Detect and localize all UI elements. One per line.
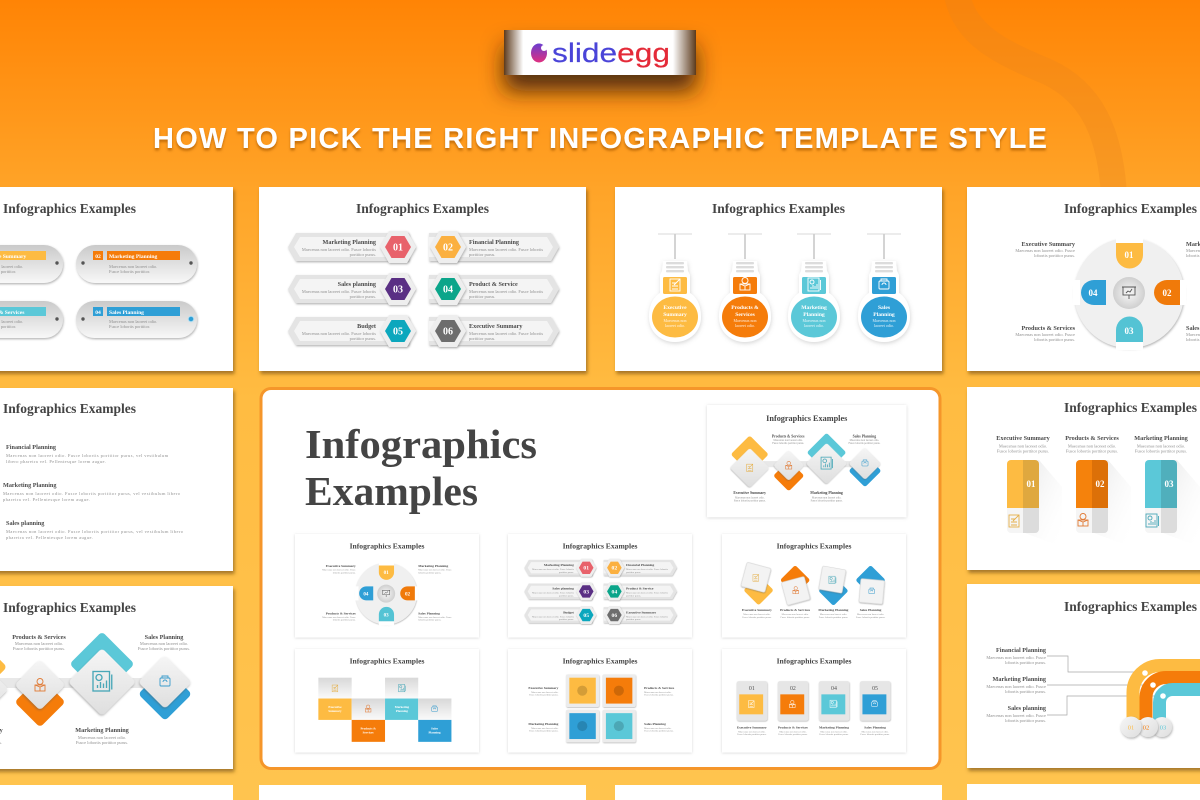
thumbnail: colored squares: Maecenas non laoreet odio. xyxy=(531,691,559,694)
panel: pill labels slide (cropped left) xyxy=(0,187,233,371)
thumbnail: hexagons: Sales planning xyxy=(552,587,574,591)
hexagon text: 03 xyxy=(393,284,403,296)
bulb 3: Marketing xyxy=(801,305,827,311)
arcs text xyxy=(986,647,1047,723)
thumbnail: stepped tiles: Infographics Examples xyxy=(350,657,424,666)
wheel text: Products & Services xyxy=(1022,325,1076,332)
wheel text: lobortis porttitor purus. xyxy=(1034,253,1075,258)
thumbnail: hexagons: Marketing Planning xyxy=(544,563,574,567)
hexagon text: 02 xyxy=(443,242,453,254)
thumbnail: stepped tiles: Products & xyxy=(360,726,376,730)
bulb 4: laoreet odio. xyxy=(874,323,894,328)
wheel text: 02 xyxy=(1162,288,1172,298)
logo wordmark: slide egg xyxy=(552,38,670,68)
sales planning entry xyxy=(6,520,184,540)
thumbnail: colored squares: Infographics Examples xyxy=(563,657,637,666)
wheel text: Maecenas non laoreet odio. Fusce xyxy=(1015,248,1075,253)
thumbnail: tilted tiles: Products & Services xyxy=(780,608,811,612)
thumbnail: numbered cards: 01 xyxy=(749,686,755,692)
bulb 2 xyxy=(719,234,771,342)
thumbnail: colored squares: Maecenas non laoreet odio. xyxy=(644,727,672,730)
hexagon text: Budget xyxy=(357,323,377,330)
bulb 1 xyxy=(649,234,701,342)
panel: diamonds slide (cropped left) xyxy=(0,586,233,769)
panel: plain text list slide (cropped left): Infographics Examples xyxy=(3,401,136,416)
thumbnail: diamonds: Maecenas non laoreet odio. xyxy=(812,496,842,499)
bulb 3: Maecenas non xyxy=(802,318,826,323)
diamonds text: Sales Planning xyxy=(145,634,184,641)
bulb 4: Maecenas non xyxy=(872,318,896,323)
panel: wheel slide (cropped right) xyxy=(967,187,1200,371)
thumbnail: colored squares xyxy=(508,649,692,753)
thumbnail: numbered cards: Maecenas non laoreet odio. xyxy=(779,730,807,733)
thumbnail: diamonds: Products & Services xyxy=(772,434,805,438)
bulb 1: Executive xyxy=(663,305,687,311)
column 3: 03 xyxy=(1164,479,1174,489)
thumbnail: tilted tiles: Fusce lobortis porttitor purus. xyxy=(780,616,810,619)
thumbnail: numbered cards: Executive Summary xyxy=(737,725,767,729)
hexagon text: Maecenas non laoreet odio. Fusce lobortis xyxy=(469,331,543,336)
marketing planning entry xyxy=(3,482,181,502)
thumbnail: colored squares: Fusce lobortis porttitor purus. xyxy=(644,730,674,733)
logo xyxy=(504,30,696,75)
main heading: Examples xyxy=(305,468,478,514)
thumbnail: colored squares: Maecenas non laoreet odio. xyxy=(531,727,559,730)
diamonds text: Maecenas non laoreet odio. xyxy=(15,641,63,646)
thumbnail: hexagons: Maecenas non laoreet odio. Fusce lobortis xyxy=(626,615,668,618)
diamonds text xyxy=(0,634,190,745)
thumbnail: diamonds: Fusce lobortis porttitor purus. xyxy=(848,442,881,445)
thumbnail: diamonds: Maecenas non laoreet odio. xyxy=(773,439,803,442)
thumbnail: diamonds: Maecenas non laoreet odio. xyxy=(850,439,879,442)
column 1: Maecenas non laoreet odio. xyxy=(999,444,1047,448)
thumbnail: hexagons: Budget xyxy=(563,610,575,614)
column 2 xyxy=(1065,435,1131,547)
icon: egg xyxy=(531,44,547,62)
thumbnail: wheel: Maecenas non laoreet odio. Fusce xyxy=(322,569,357,572)
thumbnail: hexagons: porttitor purus. xyxy=(626,594,641,597)
hexagon text: Maecenas non laoreet odio. Fusce lobortis xyxy=(302,289,376,294)
sales planning entry: Maecenas non laoreet odio. Fusce lobortis porttitor purus, vel vestibulum libero xyxy=(6,529,184,535)
column 2: Maecenas non laoreet odio. xyxy=(1068,444,1116,448)
diamonds text: Fusce lobortis porttitor purus. xyxy=(138,646,190,651)
thumbnail: stepped tiles xyxy=(295,649,479,753)
panel: pill labels slide (cropped left): Infographics Examples xyxy=(3,201,136,216)
thumbnail: colored squares: Maecenas non laoreet odio. xyxy=(644,691,672,694)
thumbnail: tilted tiles xyxy=(722,534,906,638)
thumbnail: hexagons: Maecenas non laoreet odio. Fusce lobortis xyxy=(626,568,668,571)
thumbnail: colored squares: Products & Services xyxy=(644,686,675,690)
thumbnail: numbered cards: Maecenas non laoreet odio. xyxy=(820,730,848,733)
thumbnail: hexagons: 03 xyxy=(583,589,589,595)
thumbnail: tilted tiles: Marketing Planning xyxy=(818,608,849,612)
panel: arcs slide (cropped right) xyxy=(967,584,1200,768)
hexagon text: 06 xyxy=(443,326,453,338)
bulb 3 xyxy=(788,234,840,342)
arc dots and number discs xyxy=(1120,670,1172,738)
bulb 2: Maecenas non xyxy=(734,318,756,323)
arcs text: Maecenas non laoreet odio. Fusce xyxy=(986,713,1046,718)
bulb 4 xyxy=(858,234,910,342)
thumbnail: tilted tiles: Infographics Examples xyxy=(777,542,851,551)
thumbnail: hexagons: 02 xyxy=(612,566,617,572)
thumbnail: hexagons: Product & Service xyxy=(626,587,654,591)
arcs text: Financial Planning xyxy=(996,647,1047,654)
arc dots and number discs: 01 xyxy=(1128,724,1134,732)
thumbnail: wheel: 01 xyxy=(384,570,389,576)
wheel text: Maecenas non laoreet odio. Fusce xyxy=(1015,332,1075,337)
thumbnail: wheel: Marketing Planning xyxy=(418,564,448,568)
pill text: Maecenas non laoreet odio. xyxy=(109,319,157,324)
wheel text xyxy=(1015,241,1200,342)
thumbnail: wheel: lobortis porttitor purus. xyxy=(333,571,356,574)
panel: wheel slide (cropped right): Infographics Examples xyxy=(1064,201,1197,216)
pill text xyxy=(0,254,158,329)
thumbnail: hexagons: porttitor purus. xyxy=(626,571,641,574)
pill text: Fusce lobortis porttitor. xyxy=(109,324,150,329)
wheel text: 01 xyxy=(1124,250,1134,260)
thumbnail: numbered cards: Products & Services xyxy=(778,725,809,729)
thumbnail: hexagons: Financial Planning xyxy=(626,563,654,567)
hexagon text: Financial Planning xyxy=(469,239,520,246)
thumbnail: numbered cards: Fusce lobortis porttitor purus. xyxy=(737,733,767,736)
thumbnail: tilted tiles: Fusce lobortis porttitor purus. xyxy=(742,616,772,619)
financial planning entry: Maecenas non laoreet odio. Fusce lobortis porttitor purus, vel vestibulum xyxy=(6,453,169,459)
hexagon text: Maecenas non laoreet odio. Fusce lobortis xyxy=(469,247,543,252)
diamonds graphic xyxy=(0,631,192,727)
thumbnail: diamonds: Executive Summary xyxy=(733,491,766,495)
wheel graphic xyxy=(1073,236,1186,350)
thumbnail: hexagons: Maecenas non laoreet odio. Fusce lobortis xyxy=(532,615,574,618)
arcs text: Marketing Planning xyxy=(993,676,1047,683)
hexagon text: porttitor purus. xyxy=(469,294,495,299)
column 3 xyxy=(1134,435,1200,547)
thumbnail: tilted tiles: Maecenas non laoreet odio. xyxy=(782,613,809,616)
thumbnail: colored squares: Fusce lobortis porttitor purus. xyxy=(644,694,674,697)
panel: arcs slide (cropped right): Infographics Examples xyxy=(1064,599,1197,614)
thumbnail: tilted tiles: Sales Planning xyxy=(860,608,882,612)
column 1: 01 xyxy=(1026,479,1036,489)
thumbnail: wheel: 02 xyxy=(405,591,411,597)
thumbnail: hexagons: 01 xyxy=(583,566,589,572)
bulb 1: Maecenas non xyxy=(664,318,686,323)
sales planning entry: Sales planning xyxy=(6,520,45,527)
panel: hexagon list slide xyxy=(259,187,586,371)
wheel text: lobortis porttitor purus. xyxy=(1034,337,1075,342)
wheel text: Executive Summary xyxy=(1022,241,1076,248)
hexagon text: porttitor purus. xyxy=(350,294,376,299)
pill text: Sales Planning xyxy=(109,310,144,316)
marketing planning entry: pharetra vel. Pellentesque lorem augue. xyxy=(3,497,90,502)
thumbnail: hexagons: Maecenas non laoreet odio. Fusce lobortis xyxy=(532,568,574,571)
marketing planning entry: Maecenas non laoreet odio. Fusce lobortis porttitor purus, vel vestibulum libero xyxy=(3,491,181,497)
thumbnail: numbered cards: 05 xyxy=(872,686,878,692)
thumbnail: stepped tiles: Marketing xyxy=(395,705,409,709)
thumbnail: hexagons: porttitor purus. xyxy=(626,618,641,621)
bulb 3: Planning xyxy=(803,312,825,318)
panel: columns slide (cropped right) xyxy=(967,387,1200,570)
financial planning entry: libero pharetra vel. Pellentesque lorem augue. xyxy=(6,459,106,464)
main heading xyxy=(305,421,537,514)
hexagon text: Product & Service xyxy=(469,281,518,288)
thumbnail: numbered cards: Sales Planning xyxy=(864,725,886,729)
thumbnail: diamonds: Maecenas non laoreet odio. xyxy=(735,496,765,499)
thumbnail: colored squares: Executive Summary xyxy=(528,686,559,690)
wheel text: 04 xyxy=(1088,288,1098,298)
thumbnail: diamonds: Sales Planning xyxy=(853,434,876,438)
diamonds text: Fusce lobortis porttitor purus. xyxy=(13,646,65,651)
bulb 2: laoreet odio. xyxy=(735,323,755,328)
thumbnail: numbered cards: Maecenas non laoreet odio. xyxy=(861,730,889,733)
thumbnail: tilted tiles: Maecenas non laoreet odio. xyxy=(743,613,771,616)
panel: hexagon list slide: Infographics Examples xyxy=(356,201,489,216)
column 2: Fusce lobortis porttitor purus. xyxy=(1066,448,1118,454)
hexagon text: 01 xyxy=(393,242,403,254)
column 3: Maecenas non laoreet odio. xyxy=(1137,444,1185,448)
pill text: 02 xyxy=(95,254,101,260)
arcs text: lobortis porttitor purus. xyxy=(1005,718,1046,723)
thumbnail: diamonds: Marketing Planning xyxy=(810,491,843,495)
thumbnail: colored squares: Fusce lobortis porttitor purus. xyxy=(529,694,559,697)
thumbnail: wheel: Maecenas non laoreet odio. Fusce xyxy=(418,569,453,572)
thumbnail: colored squares: Fusce lobortis porttitor purus. xyxy=(529,730,559,733)
thumbnail: hexagons: porttitor purus. xyxy=(559,571,574,574)
hexagon text: Maecenas non laoreet odio. Fusce lobortis xyxy=(302,247,376,252)
thumbnail: wheel: 04 xyxy=(363,591,369,597)
bulb 4: Planning xyxy=(873,312,895,318)
thumbnail: tilted tiles: Executive Summary xyxy=(742,608,772,612)
thumbnail: tilted tiles: Fusce lobortis porttitor purus. xyxy=(856,616,886,619)
thumbnail: tilted tiles: Maecenas non laoreet odio. xyxy=(820,613,847,616)
bulb 1: Summary xyxy=(663,312,687,318)
thumbnail: numbered cards: Marketing Planning xyxy=(819,725,849,729)
thumbnail: wheel: Executive Summary xyxy=(326,564,356,568)
thumbnail: hexagons: Maecenas non laoreet odio. Fusce lobortis xyxy=(626,592,668,595)
column 1: Fusce lobortis porttitor purus. xyxy=(997,448,1049,454)
thumbnail: stepped tiles: Services xyxy=(363,730,374,734)
thumbnail: diamonds: Fusce lobortis porttitor purus. xyxy=(772,442,804,445)
bulb 1: laoreet odio. xyxy=(665,323,685,328)
thumbnail: wheel xyxy=(295,534,479,638)
panel: central featured card xyxy=(261,388,940,768)
arcs graphic xyxy=(1133,666,1200,720)
marketing planning entry: Marketing Planning xyxy=(3,482,57,489)
diamonds text: Fusce lobortis porttitor purus. xyxy=(76,740,128,745)
hexagon graphic xyxy=(288,231,559,347)
arc dots and number discs: 02 xyxy=(1143,724,1149,732)
hexagon text: Sales planning xyxy=(338,281,377,288)
financial planning entry xyxy=(6,444,169,464)
thumbnail: hexagons: Maecenas non laoreet odio. Fusce lobortis xyxy=(532,592,574,595)
hexagon text: 04 xyxy=(443,284,453,296)
thumbnail: wheel: Products & Services xyxy=(326,611,356,615)
column 3: Fusce lobortis porttitor purus. xyxy=(1135,448,1187,454)
title: HOW TO PICK THE RIGHT INFOGRAPHIC TEMPLATE STYLE xyxy=(153,123,1047,155)
hexagon text: Maecenas non laoreet odio. Fusce lobortis xyxy=(302,331,376,336)
pill text: 04 xyxy=(95,310,101,316)
pill text: Maecenas non laoreet odio. xyxy=(109,264,157,269)
thumbnail: wheel: Maecenas non laoreet odio. Fusce xyxy=(418,616,453,619)
thumbnail: numbered cards: 02 xyxy=(790,686,796,692)
panel: columns slide (cropped right): Infographics Examples xyxy=(1064,400,1197,415)
arcs text: Maecenas non laoreet odio. Fusce xyxy=(986,684,1046,689)
column 2: Products & Services xyxy=(1065,435,1119,442)
bulb 2: Products & xyxy=(731,305,759,311)
hexagon text: porttitor purus. xyxy=(469,252,495,257)
thumbnail: stepped tiles: Planning xyxy=(429,730,441,734)
thumbnail: diamonds: Fusce lobortis porttitor purus. xyxy=(734,499,766,502)
financial planning entry: Financial Planning xyxy=(6,444,57,451)
panel: light bulbs slide xyxy=(615,187,942,371)
thumbnail: numbered cards: Maecenas non laoreet odio. xyxy=(738,730,766,733)
thumbnail: numbered cards: Fusce lobortis porttitor purus. xyxy=(860,733,890,736)
thumbnail: numbered cards: 04 xyxy=(831,686,837,692)
thumbnail: wheel: lobortis porttitor purus. xyxy=(418,619,442,622)
panel: light bulbs slide: Infographics Examples xyxy=(712,201,845,216)
thumbnail: stepped tiles: Executive xyxy=(328,705,342,709)
diamonds text: Maecenas non laoreet odio. xyxy=(78,735,126,740)
bulb 3: laoreet odio. xyxy=(804,323,824,328)
hexagon text: Marketing Planning xyxy=(323,239,377,246)
column 2: 02 xyxy=(1096,479,1105,489)
thumbnail: diamonds: Infographics Examples xyxy=(766,414,847,423)
thumbnail: hexagons: Executive Summary xyxy=(626,610,656,614)
thumbnail: tilted tiles: Maecenas non laoreet odio. xyxy=(857,613,885,616)
thumbnail: diamonds xyxy=(707,405,906,517)
arcs text: lobortis porttitor purus. xyxy=(1005,689,1046,694)
decorative wave xyxy=(957,0,1114,195)
thumbnail: hexagons: porttitor purus. xyxy=(559,618,574,621)
diamonds text: Maecenas non laoreet odio. xyxy=(140,641,188,646)
sales planning entry: pharetra vel. Pellentesque lorem augue. xyxy=(6,535,93,540)
wheel text: 03 xyxy=(1124,326,1134,336)
thumbnail: stepped tiles: Summary xyxy=(328,709,342,713)
panel: plain text list slide (cropped left) xyxy=(0,388,233,571)
thumbnail: numbered cards: Fusce lobortis porttitor purus. xyxy=(819,733,849,736)
thumbnail: hexagons: 06 xyxy=(612,613,617,619)
arcs text: lobortis porttitor purus. xyxy=(1005,660,1046,665)
thumbnail: diamonds: Fusce lobortis porttitor purus. xyxy=(811,499,843,502)
pill text: Marketing Planning xyxy=(109,254,158,260)
thumbnail: wheel: lobortis porttitor purus. xyxy=(333,619,356,622)
arcs text: Maecenas non laoreet odio. Fusce xyxy=(986,655,1046,660)
hexagon text xyxy=(302,239,543,341)
panel: diamonds slide (cropped left): Infographics Examples xyxy=(3,600,136,615)
hexagon text: Executive Summary xyxy=(469,323,523,330)
diamonds text: Marketing Planning xyxy=(75,727,130,734)
bulb 4: Sales xyxy=(878,305,891,311)
thumbnail: stepped tiles: Planning xyxy=(396,709,408,713)
hexagon text: porttitor purus. xyxy=(469,336,495,341)
diamonds text: Products & Services xyxy=(12,634,66,641)
hexagon text: 05 xyxy=(393,326,403,338)
thumbnail: wheel: Maecenas non laoreet odio. Fusce xyxy=(322,616,357,619)
thumbnail: hexagons: 05 xyxy=(583,613,589,619)
column 1: Executive Summary xyxy=(996,435,1051,442)
panel: bottom row slide stubs xyxy=(0,784,1200,800)
thumbnail: wheel: lobortis porttitor purus. xyxy=(418,571,442,574)
bulb 2: Services xyxy=(735,312,756,318)
pills graphic xyxy=(0,245,197,338)
hexagon text: porttitor purus. xyxy=(350,336,376,341)
thumbnail: hexagons: 04 xyxy=(612,589,617,595)
thumbnail: numbered cards: Infographics Examples xyxy=(777,657,851,666)
hexagon text: Maecenas non laoreet odio. Fusce lobortis xyxy=(469,289,543,294)
column 3: Marketing Planning xyxy=(1134,435,1189,442)
thumbnail: numbered cards: Fusce lobortis porttitor purus. xyxy=(778,733,808,736)
thumbnail: wheel: Sales Planning xyxy=(418,611,440,615)
column 1 xyxy=(996,435,1062,547)
thumbnail: wheel: Infographics Examples xyxy=(350,542,424,551)
thumbnail: colored squares: Sales Planning xyxy=(644,722,666,726)
leader lines xyxy=(1047,656,1163,715)
arcs text: Sales planning xyxy=(1008,705,1047,712)
thumbnail: colored squares: Marketing Planning xyxy=(528,722,559,726)
pill text: Fusce lobortis porttitor. xyxy=(109,269,150,274)
arc dots and number discs: 03 xyxy=(1160,724,1166,732)
hexagon text: porttitor purus. xyxy=(350,252,376,257)
main heading: Infographics xyxy=(305,421,537,467)
thumbnail: wheel: 03 xyxy=(384,613,389,619)
thumbnail: stepped tiles: Sales xyxy=(431,726,439,730)
thumbnail: hexagons: Infographics Examples xyxy=(563,542,637,551)
thumbnail: hexagons: porttitor purus. xyxy=(559,594,574,597)
thumbnail: numbered cards xyxy=(722,649,906,753)
thumbnail: hexagons xyxy=(508,534,692,638)
thumbnail: tilted tiles: Fusce lobortis porttitor purus. xyxy=(819,616,848,619)
